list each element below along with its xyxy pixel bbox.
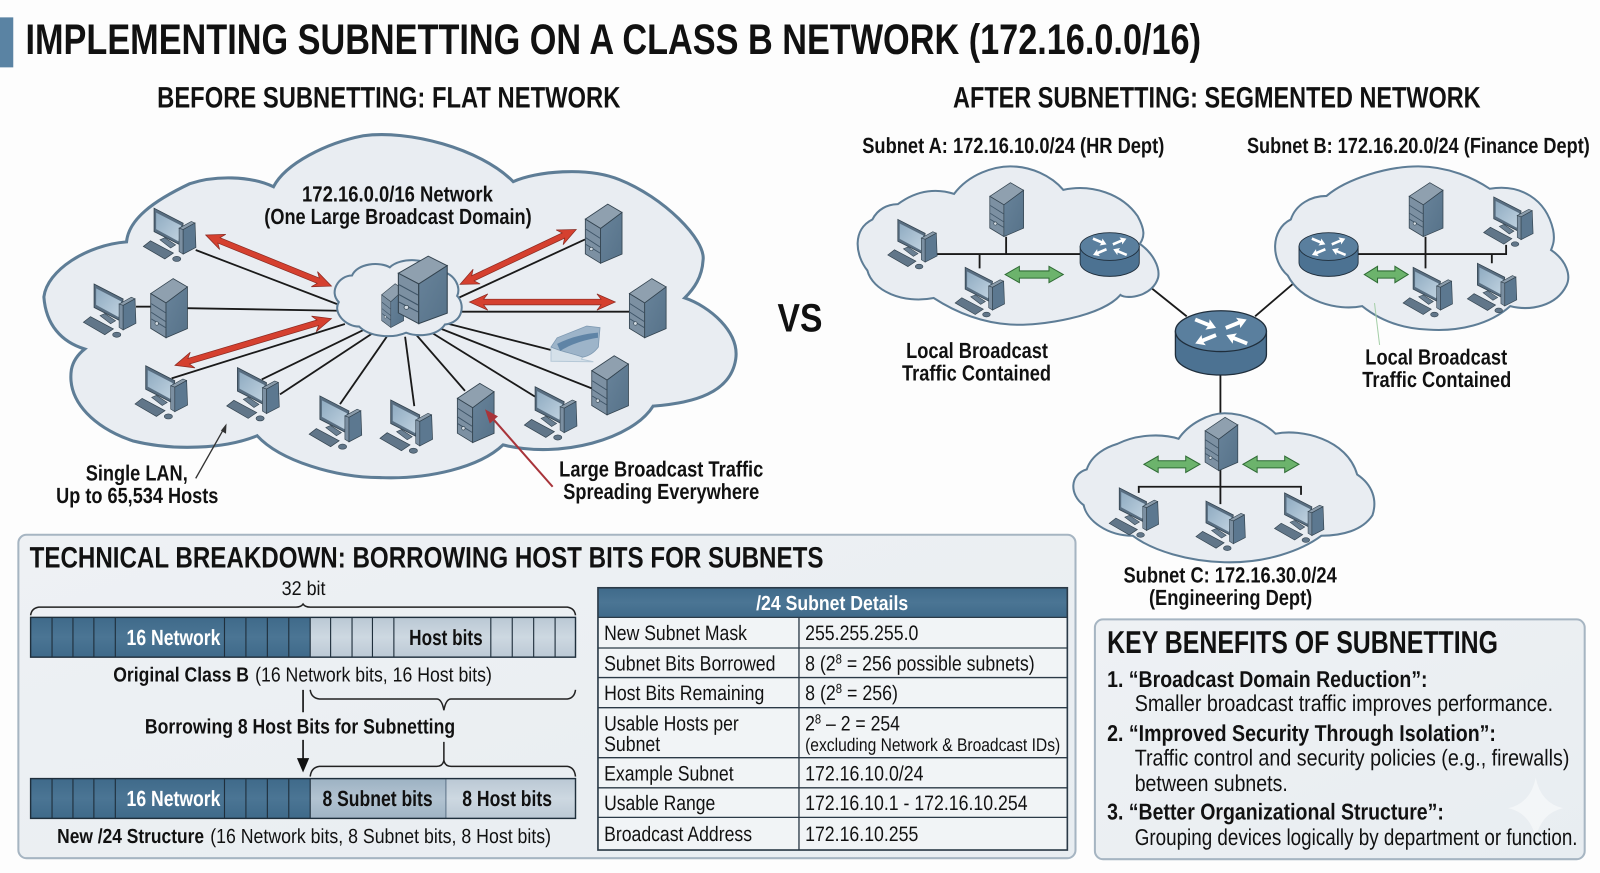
panel heading: TECHNICAL BREAKDOWN: BORROWING HOST BITS FOR SUBNETS (30, 542, 823, 575)
table: /24 subnet details: (excluding Network & Broadcast IDs) (805, 735, 1060, 755)
original class B bar: Host bits (409, 626, 483, 650)
table: /24 subnet details: 8 (2 (805, 652, 841, 676)
benefit 1 (1107, 666, 1553, 716)
benefit 2: between subnets. (1135, 770, 1288, 796)
cloud label: 172.16.0.0/16 Network (302, 182, 493, 207)
table: /24 subnet details: 8 (2 (805, 682, 841, 705)
title accent bar (0, 17, 13, 67)
panel: flat network diagram (44, 135, 736, 478)
table: /24 subnet details: Usable Range (604, 792, 715, 815)
subnet C label (1123, 563, 1337, 610)
new /24 bar: 8 Host bits (462, 787, 552, 811)
benefits heading: KEY BENEFITS OF SUBNETTING (1107, 625, 1498, 660)
label: subnet B traffic: Local Broadcast (1365, 345, 1507, 369)
panel: technical breakdown (18, 535, 1076, 858)
benefit 2: 2. “Improved Security Through Isolation”: (1107, 720, 1496, 746)
table: /24 subnet details: Usable Hosts per (604, 712, 739, 736)
table: /24 subnet details: 255.255.255.0 (805, 621, 918, 645)
original class B caption: Original Class B (113, 664, 249, 687)
table: /24 subnet details: = 256) (842, 682, 898, 705)
sparkle watermark (1508, 778, 1563, 839)
label: subnet B traffic (1362, 345, 1511, 392)
table: /24 subnet details: 8 (836, 681, 842, 696)
table: /24 subnet details: Broadcast Address (604, 822, 752, 846)
large network cloud (44, 135, 736, 478)
central hub (335, 256, 462, 336)
computers (83, 208, 577, 453)
red broadcast arrows (173, 222, 615, 373)
32 bit brace (31, 604, 576, 615)
table: /24 subnet details: = 256 possible subnets) (842, 652, 1035, 676)
table: /24 subnet details: 2 (805, 712, 817, 736)
table: /24 subnet details: 172.16.10.1 - 172.16.10.254 (805, 792, 1028, 815)
inter-router links (1131, 271, 1305, 414)
servers (151, 204, 666, 443)
benefit 3: 3. “Better Organizational Structure”: (1107, 799, 1444, 825)
host bits brace (310, 690, 576, 710)
subnet A label: Subnet A: 172.16.10.0/24 (HR Dept) (862, 134, 1164, 158)
cloud label (264, 182, 532, 229)
original class B caption: (16 Network bits, 16 Host bits) (255, 664, 492, 687)
table: /24 subnet details: 8 (836, 651, 842, 666)
arrow: borrowing (297, 690, 309, 772)
heading: before subnetting: BEFORE SUBNETTING: FLAT NETWORK (157, 82, 620, 115)
callout: single LAN: Single LAN, (86, 461, 188, 486)
panel: key benefits (1095, 619, 1585, 859)
table: /24 subnet details: Host Bits Remaining (604, 682, 764, 705)
subnet C label: Subnet C: 172.16.30.0/24 (1123, 563, 1337, 588)
table: /24 subnet details: 172.16.10.0/24 (805, 762, 923, 786)
new /24 bar: 8 Subnet bits (322, 787, 433, 811)
table: /24 subnet details: Subnet (604, 733, 660, 756)
panel: segmented network diagram (858, 134, 1590, 610)
benefit 2 (1107, 720, 1569, 796)
callout: large broadcast traffic (485, 409, 763, 504)
new /24 bar (31, 779, 576, 818)
benefit 3 (1107, 799, 1578, 850)
versus label: VS (778, 297, 822, 341)
new /24 bar: 16 Network (127, 787, 220, 811)
label: subnet A traffic: Traffic Contained (902, 361, 1051, 386)
connection lines (136, 239, 630, 406)
pointer line to subnet B (1374, 303, 1380, 345)
callout: single LAN (56, 423, 227, 508)
subnet brace (310, 742, 576, 777)
new /24 caption (57, 826, 551, 848)
original class B bar: 16 Network (127, 626, 220, 650)
table: /24 subnet details: 8 (815, 711, 821, 727)
subnet C label: (Engineering Dept) (1149, 586, 1312, 610)
heading: after subnetting: AFTER SUBNETTING: SEGMENTED NETWORK (953, 82, 1481, 115)
table: /24 subnet details: New Subnet Mask (604, 621, 748, 645)
subnet B cloud (1275, 166, 1568, 330)
subnet C cloud (1073, 413, 1374, 562)
label: subnet A traffic (902, 339, 1051, 386)
original class B bar (31, 617, 576, 657)
callout: large broadcast traffic: Spreading Everywhere (563, 480, 759, 504)
table: /24 subnet details: /24 Subnet Details (756, 593, 908, 615)
32 bit label: 32 bit (282, 578, 326, 600)
table: /24 subnet details: Example Subnet (604, 762, 734, 786)
label: subnet B traffic: Traffic Contained (1362, 367, 1511, 392)
cloud label: (One Large Broadcast Domain) (264, 205, 532, 229)
table: /24 subnet details (598, 588, 1067, 850)
borrowing label: Borrowing 8 Host Bits for Subnetting (145, 715, 455, 739)
new /24 caption: New /24 Structure (57, 826, 204, 848)
new /24 caption: (16 Network bits, 8 Subnet bits, 8 Host bits) (210, 826, 551, 848)
table: /24 subnet details: Subnet Bits Borrowed (604, 652, 776, 676)
title: IMPLEMENTING SUBNETTING ON A CLASS B NETWORK (172.16.0.0/16) (26, 15, 1201, 63)
callout: single LAN: Up to 65,534 Hosts (56, 484, 218, 508)
subnet A cloud (858, 166, 1159, 325)
table: /24 subnet details: – 2 = 254 (821, 712, 900, 736)
icon: printer device (551, 326, 600, 362)
central router (1175, 311, 1266, 375)
benefit 1: 1. “Broadcast Domain Reduction”: (1107, 666, 1428, 692)
original class B caption (113, 664, 492, 687)
callout: large broadcast traffic: Large Broadcast Traffic (559, 457, 763, 482)
label: subnet A traffic: Local Broadcast (906, 339, 1048, 363)
table: /24 subnet details: 172.16.10.255 (805, 822, 918, 846)
